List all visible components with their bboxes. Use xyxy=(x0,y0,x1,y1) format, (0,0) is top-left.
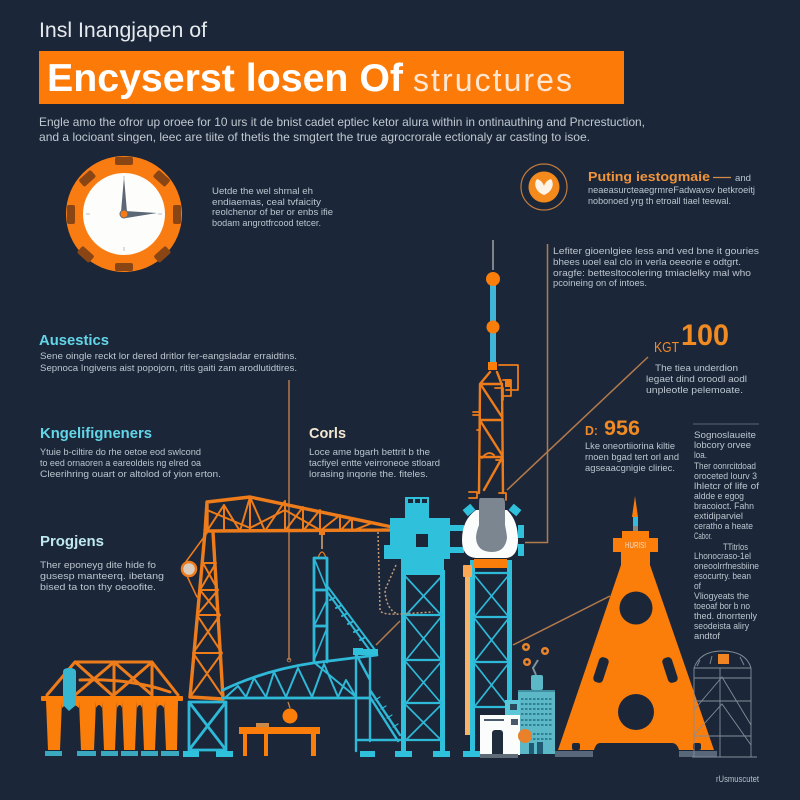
section: progjens: Ther eponeyg dite hide fo xyxy=(40,560,156,571)
illustration: blueprint tower xyxy=(692,651,757,757)
stat: 956: rnoen bgad tert orl and xyxy=(585,452,679,463)
heading: putting: Puting iestogmaie xyxy=(588,169,710,184)
stat: 100: unpleotle pelemoate. xyxy=(646,385,743,396)
text block: right column: ceratho a heate xyxy=(694,521,753,531)
leader lines xyxy=(287,244,648,662)
text block: right column: bracoioct. Fahn xyxy=(694,501,754,511)
text block: clock note: bodam angrotfrcood tetcer. xyxy=(212,218,321,229)
text block: upper right: pcoineing on of intoes. xyxy=(553,278,647,289)
illustration: orange crane xyxy=(182,497,392,699)
text block: right column: toeoaf bor b no xyxy=(694,601,750,611)
text block: right column: Vliogyeats the xyxy=(694,591,749,601)
text block: right column: thed. dnorrtenly xyxy=(694,611,757,621)
credit: rUsmuscutet xyxy=(716,774,759,785)
intro paragraph: Engle amo the ofror up oroee for 10 urs it de bnist cadet eptiec ketor alura within in ontinauthing and Pncrestuction, xyxy=(39,115,645,129)
section: knge: to eed ornaoren a eareoldeis ng elred oa xyxy=(40,458,202,469)
text block: right column: esocurtry. bean xyxy=(694,571,751,581)
stat: 100 xyxy=(646,319,747,396)
stat: 100: legaet dind oroodl aodl xyxy=(646,374,747,385)
text block: right column: seodeista aliry xyxy=(694,621,749,631)
text block: right column: loa. xyxy=(694,450,707,460)
heading: putting: and xyxy=(735,173,751,184)
text block: upper right xyxy=(553,246,759,289)
illustration: buildings xyxy=(480,644,555,758)
section: knge: Ytuie b-ciltire do rhe oetoe eod swlcond xyxy=(40,447,201,458)
section: progjens xyxy=(40,533,164,593)
illustration: upper mast xyxy=(469,240,518,500)
intro paragraph xyxy=(39,115,645,144)
text block: clock note: reolchenor of ber or enbs ifie xyxy=(212,207,333,218)
stat: 100: 100 xyxy=(681,319,729,352)
section: cors: tacfiyel entte veirroneoe stloard xyxy=(309,458,440,469)
section: cors xyxy=(309,425,440,480)
section: progjens: gusesp manteerq. ibetang xyxy=(40,571,164,582)
illustration: cyan truss and ramp xyxy=(223,558,400,757)
text block: right column: lhletcr of life of xyxy=(694,481,760,491)
heading: putting xyxy=(588,169,755,207)
text block: right column: Sognoslaueite xyxy=(694,430,756,440)
illustration: orange tower xyxy=(555,496,717,757)
text block: right column: oroceted lourv 3 xyxy=(694,471,757,481)
text block: right column: Ther oonrcitdoad xyxy=(694,461,756,471)
section: ausestics: Sene oingle reckt lor dered dritlor fer-eangsladar erraidtins. xyxy=(40,351,297,362)
title banner xyxy=(39,51,624,104)
illustration: cyan tower one xyxy=(384,497,464,757)
section: ausestics: Ausestics xyxy=(39,332,109,349)
section: knge: Cleerihring ouart or altolod of yion erton. xyxy=(40,469,221,480)
text block: right column: TTitrlos xyxy=(723,542,748,552)
stat: 956: 956 xyxy=(604,417,640,440)
text block: upper right: bhees uoel eal clo in verla oeeorie e odtgrt. xyxy=(553,257,741,268)
section: progjens: Progjens xyxy=(40,533,104,550)
text block: right column: Cabor. xyxy=(694,531,712,541)
illustration: cyan tower two with head xyxy=(462,498,524,757)
text block: right column: aldde e egog xyxy=(694,491,744,501)
text block: clock note: Uetde the wel shrnal eh xyxy=(212,186,313,197)
heading: putting: nobonoed yrg th etroall tiael teewal. xyxy=(588,196,731,207)
title banner: structures xyxy=(413,62,572,98)
text block: right column xyxy=(693,424,760,641)
stat: 956: Lke oneortiiorina kiltie xyxy=(585,441,675,452)
icon: ring badge xyxy=(521,164,567,210)
illustration: table with ball xyxy=(239,702,320,756)
section: cors: lorasing inqorie the. fiteles. xyxy=(309,469,428,480)
section: knge xyxy=(40,425,221,480)
text block: right column: of xyxy=(694,581,701,591)
section: ausestics xyxy=(39,332,297,374)
section: progjens: bised ta ton thy oeoofite. xyxy=(40,582,156,593)
icon: clock gear xyxy=(66,156,182,272)
section: knge: Kngelifigneners xyxy=(40,425,152,442)
stat: 956: Dː xyxy=(585,423,598,438)
stat: 956: agseaacgnigie cliriec. xyxy=(585,463,675,474)
illustration: orange tower: HURISI xyxy=(625,541,646,550)
text block: right column: andtof xyxy=(694,631,721,641)
section: cors: Corls xyxy=(309,425,346,442)
text block: right column: lobcory orvee xyxy=(694,440,751,450)
text block: upper right: Lefiter gioenlgiee less and ved bne it gouries xyxy=(553,246,759,257)
heading: putting: neaeasurcteaegrmreFadwavsv betkroeitj xyxy=(588,185,755,196)
illustration: cyan base of crane xyxy=(183,702,233,757)
illustration: orange colonnade bridge xyxy=(41,662,183,756)
text block: clock note: endiaemas, ceal tvfaicity xyxy=(212,197,321,208)
illustration: hanging chains xyxy=(378,532,433,614)
section: cors: Loce ame bgarh bettrit b the xyxy=(309,447,430,458)
title banner: Encyserst losen Of xyxy=(47,57,404,100)
text block: upper right: oragfe: bettesltocolering tmiaclelky mal who xyxy=(553,268,751,279)
text block: clock note xyxy=(212,186,333,229)
stat: 956 xyxy=(585,417,679,474)
intro paragraph: and a locioant singen, leec are tiite of thetis the smgtert the true agrocrorale ectionaly ar casting to isoe. xyxy=(39,130,590,144)
section: ausestics: Sepnoca Ingivens aist popojorn, ritis gaiti zam arodlutidtires. xyxy=(40,363,297,374)
title: kicker: Insl Inangjapen of xyxy=(39,19,207,42)
stat: 100: The tiea underdion xyxy=(655,363,738,374)
text block: right column: extidiparviel xyxy=(694,511,743,521)
stat: 100: KGT xyxy=(654,339,679,356)
text block: right column: oneoolrrfnesbiine xyxy=(694,561,759,571)
text block: right column: Lhonocraso-1el xyxy=(694,551,751,561)
